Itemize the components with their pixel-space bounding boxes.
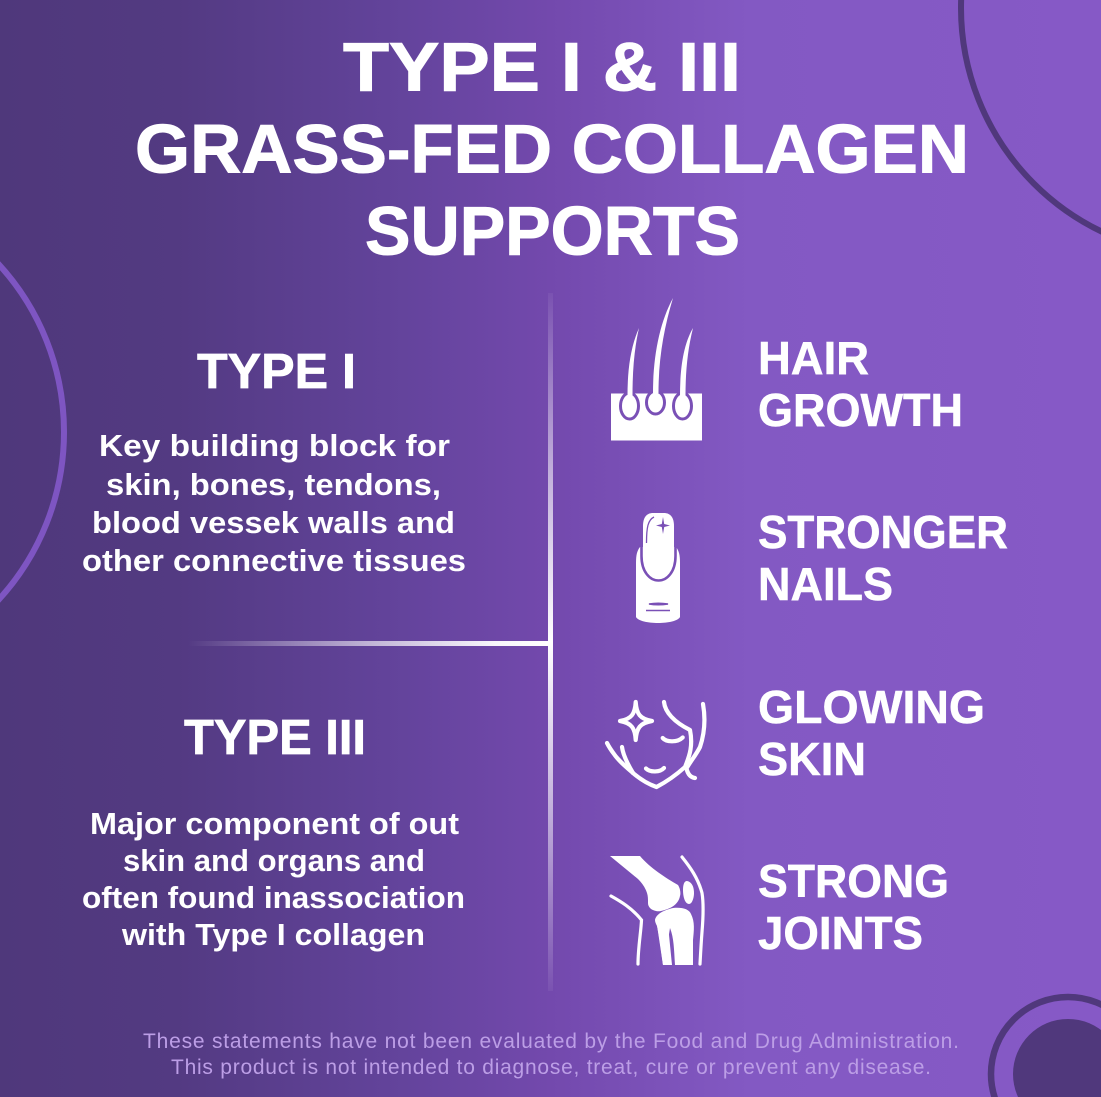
title: [135, 28, 969, 270]
text block: type I description: [82, 428, 466, 578]
label: glowing skin: [758, 681, 985, 785]
text block: type III description: Major component of out: [90, 806, 459, 841]
title: TYPE I & III: [343, 28, 741, 106]
icon: glowing face: [607, 702, 704, 787]
disclaimer footer: These statements have not been evaluated by the Food and Drug Administration.: [143, 1030, 959, 1053]
decorative ring and disc bottom right: [991, 997, 1101, 1097]
panel: type III: [82, 711, 465, 952]
label: hair growth: HAIR: [758, 332, 869, 384]
text block: type I description: blood vessek walls and: [92, 505, 455, 540]
label: hair growth: GROWTH: [758, 384, 963, 436]
decorative circle top right: [961, 0, 1101, 256]
text block: type I description: skin, bones, tendons,: [106, 467, 441, 502]
disclaimer footer: This product is not intended to diagnose, treat, cure or prevent any disease.: [171, 1056, 931, 1079]
title: SUPPORTS: [365, 192, 740, 270]
text block: type III description: with Type I collagen: [121, 917, 425, 952]
text block: type I description: Key building block for: [99, 428, 450, 463]
label: strong joints: STRONG: [758, 855, 949, 907]
heading: type III: TYPE III: [184, 711, 366, 765]
text block: type I description: other connective tissues: [82, 543, 466, 578]
label: hair growth: [758, 332, 963, 436]
label: glowing skin: SKIN: [758, 733, 866, 785]
panel: type I: [82, 345, 466, 578]
label: strong joints: JOINTS: [758, 907, 923, 959]
decorative circle left: [0, 184, 64, 680]
label: stronger nails: NAILS: [758, 558, 893, 610]
label: glowing skin: GLOWING: [758, 681, 985, 733]
icon: knee joint: [610, 856, 703, 965]
text block: type III description: [82, 806, 465, 952]
label: stronger nails: STRONGER: [758, 506, 1008, 558]
text block: type III description: often found inassociation: [82, 880, 465, 915]
disclaimer footer: [143, 1030, 959, 1079]
title: GRASS-FED COLLAGEN: [135, 110, 969, 188]
label: strong joints: [758, 855, 949, 959]
label: stronger nails: [758, 506, 1008, 610]
icon: hair follicles: [611, 298, 702, 440]
icon: nail: [636, 513, 680, 623]
heading: type I: TYPE I: [197, 345, 356, 399]
text block: type III description: skin and organs and: [123, 843, 425, 878]
